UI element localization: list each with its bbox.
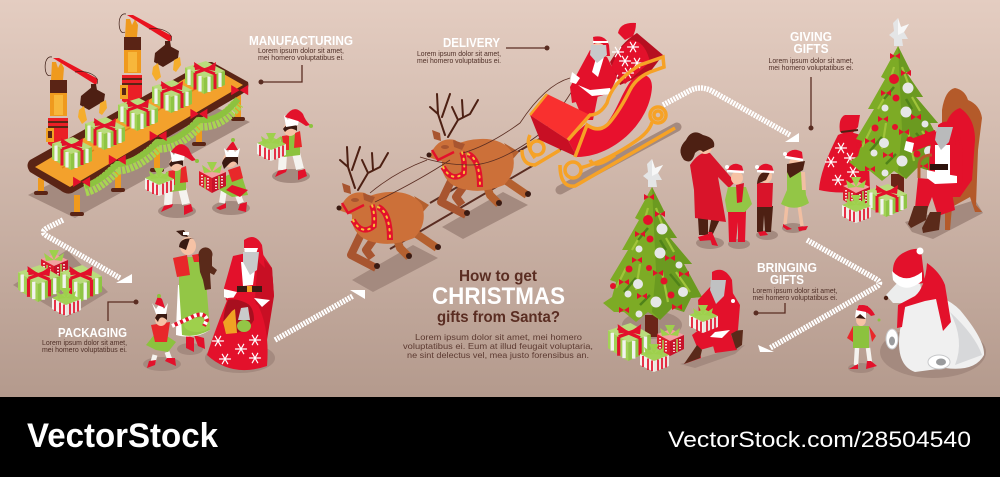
arrow: manufacturing to packaging: [44, 220, 132, 283]
sleigh body: [568, 75, 652, 157]
gift big: [608, 323, 651, 361]
santa on throne: [904, 122, 963, 233]
gift held: [145, 168, 174, 196]
text: delivery: [417, 36, 501, 65]
leader: bringing gifts: [754, 303, 785, 316]
elf carrying gift, left: [145, 144, 199, 218]
garland: [85, 99, 238, 190]
panel: manufacturing conveyor: [28, 14, 250, 218]
elf carrying gift, right: [257, 109, 313, 183]
central body text: ne sint delectus vel, mea justo forensibus an.: [407, 350, 589, 360]
santa's gift sack: [207, 298, 268, 370]
text: manufacturing: [249, 34, 353, 62]
text: manufacturing: Lorem ipsum dolor sit amet,: [258, 46, 344, 55]
tree with santa on throne: [819, 18, 983, 239]
reins: [370, 78, 574, 202]
text: bringing gifts: mei homero voluptatibus ei.: [752, 293, 838, 302]
central body text: voluptatibus ei. Eum at illud feugait voluptaria,: [403, 341, 593, 351]
central title: gifts from Santa?: [437, 309, 560, 326]
tree shadow: [622, 311, 682, 339]
gift on belt 4: [152, 80, 192, 113]
panel: packaging gifts: [13, 250, 108, 317]
santa driving: [570, 36, 617, 120]
gift sack on sleigh: [610, 23, 663, 85]
gift held by santa: [689, 305, 718, 333]
sleigh: [522, 23, 677, 190]
text: bringing gifts: BRINGING: [757, 261, 817, 275]
small elf beside bear: [847, 305, 880, 373]
child with green top: [725, 164, 752, 249]
arrow: delivery to giving: [663, 88, 799, 142]
gift red: [657, 325, 684, 356]
robot arm left: [45, 57, 107, 150]
christmas tree: [603, 159, 702, 322]
footer band: [0, 397, 1000, 477]
polar bear with hat: [880, 248, 986, 378]
gift big: [867, 184, 907, 217]
child with green dress: [781, 150, 809, 233]
woman with teddy: [173, 230, 217, 355]
central body text: Lorem ipsum dolor sit amet, mei homero: [415, 332, 582, 342]
text: giving gifts: [768, 30, 854, 72]
red bows on belt: [73, 85, 248, 187]
text: packaging: PACKAGING: [58, 326, 127, 340]
text: giving gifts: GIFTS: [794, 42, 828, 56]
sleigh shadow: [560, 127, 677, 190]
harness poles: [390, 137, 563, 249]
text: giving gifts: GIVING: [790, 30, 832, 44]
leader: delivery: [506, 46, 550, 50]
gift on belt 3: [118, 98, 158, 131]
text: packaging: mei homero voluptatibus ei.: [42, 345, 127, 354]
gift held by right elf: [257, 133, 286, 161]
central title: How to get: [459, 268, 537, 285]
elf with red gift: [199, 138, 250, 215]
reindeer shadows: [352, 192, 528, 292]
text: delivery: DELIVERY: [443, 36, 501, 50]
text: bringing gifts: GIFTS: [770, 273, 804, 287]
tree with kneeling santa: [603, 159, 745, 372]
gift on belt 1: [52, 137, 92, 170]
conveyor belt: [28, 62, 248, 194]
big gift left: [18, 265, 60, 302]
leader: packaging: [108, 300, 138, 321]
gift on belt 5: [185, 61, 225, 94]
santa kneeling: [680, 270, 745, 368]
red gift back: [41, 250, 68, 281]
family queue: [680, 132, 809, 249]
throne: [905, 88, 983, 239]
reindeer front: [336, 147, 441, 269]
text: bringing gifts: Lorem ipsum dolor sit amet,: [752, 286, 838, 295]
small gift front: [52, 288, 81, 316]
gift on belt 2: [85, 117, 125, 150]
teddy bear: [198, 247, 217, 290]
sleigh runners: [522, 107, 675, 186]
text: giving gifts: Lorem ipsum dolor sit amet,: [768, 56, 854, 65]
leader: giving gifts: [808, 77, 814, 130]
conveyor legs: [36, 95, 243, 214]
text: bringing gifts: [752, 261, 838, 302]
text: manufacturing: MANUFACTURING: [249, 34, 353, 48]
big gift right: [60, 265, 102, 302]
candy cane basket: [172, 314, 210, 332]
gift front: [842, 195, 871, 223]
santa with sack: [205, 237, 275, 373]
arrow: packaging to delivery: [275, 290, 365, 340]
text: manufacturing: mei homero voluptatibus ei.: [258, 53, 344, 62]
text: giving gifts: mei homero voluptatibus ei.: [768, 63, 854, 72]
text: delivery: Lorem ipsum dolor sit amet,: [417, 49, 501, 58]
arrow: giving to bringing: [758, 240, 880, 352]
central title: [403, 268, 593, 360]
mother: [680, 132, 735, 249]
robot arm right: [119, 14, 181, 107]
central title: CHRISTMAS: [432, 283, 565, 310]
gift sack behind tree: [819, 115, 870, 192]
gift back red: [843, 177, 870, 208]
text: delivery: mei homero voluptatibus ei.: [417, 56, 501, 65]
central body text: [403, 332, 593, 360]
reindeer back: [426, 94, 531, 216]
gift small: [640, 344, 669, 372]
small elf with candy cane: [143, 294, 210, 371]
trunk: [645, 315, 658, 337]
text: packaging: [42, 326, 127, 354]
christmas tree: [849, 18, 948, 196]
leader: manufacturing: [258, 65, 302, 84]
child with red top: [755, 164, 778, 240]
footer: url: VectorStock.com/28504540: [668, 427, 971, 452]
text: packaging: Lorem ipsum dolor sit amet,: [42, 338, 127, 347]
footer: brand: VectorStock: [27, 417, 218, 455]
